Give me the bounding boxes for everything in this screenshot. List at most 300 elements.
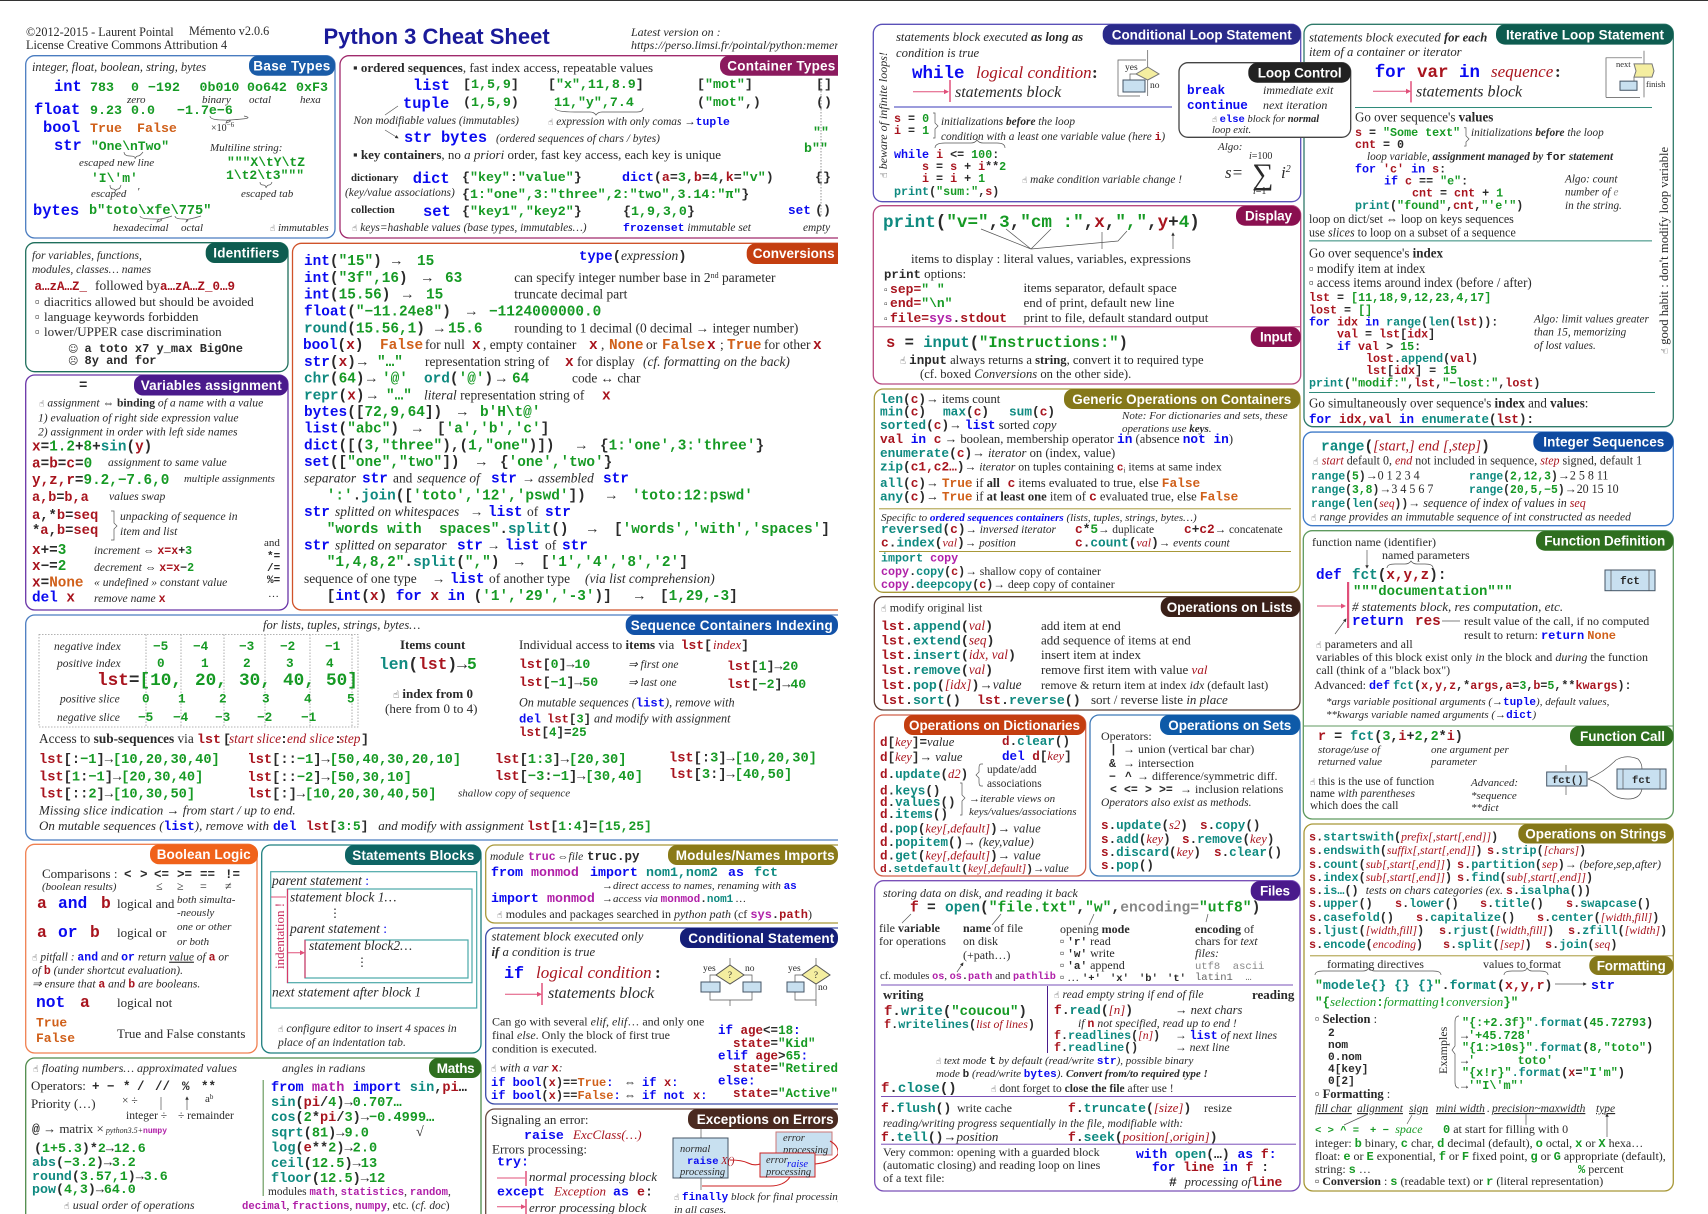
heading: maths: Maths — [437, 1061, 475, 1076]
conversions content: separator — [304, 471, 357, 486]
variables content: %= — [267, 575, 281, 587]
index table: 1 — [178, 692, 186, 707]
open syntax: storing data on disk, and reading it back — [883, 886, 1079, 900]
string methods: .center([width,fill]) — [1544, 910, 1659, 925]
set methods — [1101, 818, 1282, 873]
identifiers content: a toto x7 y_max BigOne — [84, 342, 243, 356]
conversions content: , — [601, 337, 604, 352]
base types content: −6 — [227, 121, 235, 129]
list descriptions: remove & return item at index idx (default last) — [1041, 678, 1268, 692]
set operators: → inclusion relations — [1180, 782, 1284, 796]
maths right content: floor(12.5)→12 — [271, 1172, 385, 1187]
boolean content: ☝ pitfall : and and or return value of a or — [32, 952, 229, 965]
list operations — [881, 601, 1081, 708]
conditional syntax: if a condition is true — [492, 945, 595, 959]
indexing text: lst[:]→[10,20,30,40,50] — [248, 788, 436, 803]
formatting mini-language: float: e or E exponential, f or F fixed point, g or G appropriate (default), — [1315, 1149, 1666, 1164]
index table: 3 — [262, 692, 270, 707]
heading: files: Files — [1260, 884, 1290, 898]
conversions content: → — [477, 455, 486, 471]
def syntax: Advanced: def fct(x,y,z,*args,a=3,b=5,**kwargs): — [1314, 678, 1632, 693]
format syntax: values to format — [1483, 957, 1562, 971]
conversions content: , empty container — [483, 337, 577, 352]
boolean content: > — [140, 868, 148, 882]
variables content: x+=3 — [32, 543, 66, 559]
conversions content: 'toto:12:pswd' — [632, 488, 753, 504]
exceptions syntax: raise — [524, 1128, 564, 1143]
base types content: hexa — [300, 94, 321, 106]
boolean content: or both — [177, 936, 210, 948]
list operations: lst.remove(val) — [881, 662, 993, 678]
conversions content: of — [527, 504, 539, 519]
container types content: (ordered sequences of chars / bytes) — [496, 133, 660, 145]
maths right content: ceil(12.5)→13 — [271, 1157, 377, 1172]
string methods: s.casefold() — [1309, 911, 1394, 925]
variables content: a=b=c=0 — [32, 457, 92, 473]
conversions content: "…" — [377, 355, 403, 371]
header credits: Mémento v2.0.6 — [189, 24, 269, 38]
conversions content: or — [646, 337, 658, 352]
boolean content: = — [200, 879, 207, 893]
container types content: tuple — [403, 95, 449, 113]
open syntax: utf8 ascii — [1195, 961, 1264, 973]
call syntax: Advanced: — [1470, 777, 1518, 789]
index table: positive slice — [59, 694, 120, 706]
format examples: "{:+2.3f}".format(45.72793) — [1462, 1016, 1653, 1030]
index table: 3 — [286, 656, 294, 671]
variables content — [32, 378, 281, 607]
go over values — [1309, 110, 1652, 241]
boolean shortcut code: ⇔ — [624, 1088, 636, 1102]
range content: range(2,12,3)→2 5 8 11 — [1469, 469, 1608, 484]
conversions content: b'H\t@' — [480, 405, 540, 421]
conversions content: can specify integer number base in 2 — [514, 270, 711, 285]
latest version note — [630, 28, 838, 52]
dictionary operations: d.values() — [880, 796, 956, 810]
conversions content: 15.6 — [448, 321, 483, 337]
heading: boolean logic: Boolean Logic — [157, 847, 251, 862]
selection list: 4[key] — [1328, 1064, 1368, 1076]
with open guarded block: (automatic closing) and reading loop on lines — [883, 1158, 1101, 1172]
conversions content: → — [607, 488, 616, 504]
indexing text: lst[−1]→50 — [519, 675, 598, 690]
close flush seek: write cache — [957, 1101, 1012, 1115]
dictionary operations: d.items() — [880, 808, 948, 822]
base types content: binary — [202, 94, 231, 106]
variables content: y,z,r=9.2,−7.6,0 — [32, 473, 169, 489]
list descriptions: add sequence of items at end — [1041, 633, 1191, 648]
conversions content: → — [522, 471, 535, 486]
generic operations content: copy.copy(c)→ shallow copy of container — [881, 565, 1101, 579]
elif code: if age<=18: — [718, 1024, 801, 1038]
conversions content: [1,29,-3] — [660, 589, 738, 605]
indexing text: ] — [361, 732, 369, 747]
formatting mini-language: < > ^ = — [1315, 1125, 1359, 1137]
def syntax: call (think of a "black box") — [1316, 663, 1450, 677]
def syntax: *args variable positional arguments (→tuple), default values, — [1326, 696, 1610, 709]
modules content: monmod — [531, 865, 579, 880]
string methods: s.ljust([width,fill]) — [1309, 923, 1424, 938]
boolean content: < — [124, 868, 132, 882]
variables content: ☝ assignment ⇔ binding of a name with a value — [39, 397, 263, 410]
heading: conditional loop statement — [1103, 24, 1301, 45]
heading: exceptions on errors: Exceptions on Errors — [697, 1112, 834, 1127]
go over index: lst = [11,18,9,12,23,4,17] — [1309, 291, 1491, 305]
indexing text: lst[3:]→[40,50] — [669, 768, 792, 783]
heading: exceptions on errors — [688, 1109, 838, 1129]
conversions content: parameter — [719, 270, 776, 285]
while example: print("sum:",s) — [894, 185, 999, 199]
heading: identifiers: Identifiers — [213, 246, 279, 260]
base types content: ×10 — [211, 123, 227, 134]
indexing text: lst[1:3]→[20,30] — [495, 753, 626, 768]
icon: if/else flowchart: ? — [728, 970, 732, 980]
conversions content: truncate decimal part — [514, 287, 628, 302]
while example: while i <= 100: — [894, 148, 999, 162]
heading: operations on strings — [1518, 824, 1673, 844]
conversions content: for display — [577, 354, 635, 369]
heading: identifiers — [206, 243, 288, 263]
conversions content: "words with spaces".split() — [327, 522, 569, 538]
boolean content: <= — [154, 868, 169, 882]
boolean content: not — [36, 993, 65, 1012]
variables content: … — [268, 588, 279, 600]
elif explanation: Can go with several elif, elif… and only one — [492, 1015, 704, 1029]
formatting mini-language: 0 at start for filling with 0 — [1443, 1122, 1568, 1137]
conditional syntax: statements block — [548, 985, 655, 1002]
maths left content: ☝ usual order of operations — [64, 1198, 195, 1212]
indexing text: [1:4]=[15,25] — [550, 819, 652, 834]
open syntax: (+path…) — [963, 948, 1010, 962]
boolean content: -neously — [177, 907, 214, 919]
format syntax: formating directives — [1327, 957, 1424, 971]
open syntax: '+' — [1082, 973, 1101, 985]
conversions content: → — [467, 305, 476, 321]
conversions content: False — [662, 338, 705, 354]
icon: if/else flowchart: yes — [703, 964, 716, 974]
indexing text: and modify with assignment — [375, 818, 524, 833]
conversions content: sequence of — [417, 471, 482, 486]
with open guarded block: Very common: opening with a guarded block — [883, 1145, 1100, 1159]
maths right content: decimal, fractions, numpy, etc. (cf. doc) — [242, 1200, 450, 1213]
set operators: | — [1110, 744, 1117, 757]
loop control content: immediate exit — [1263, 83, 1334, 97]
generic operations content: (c) — [1032, 405, 1055, 420]
exception flow diagram: raise — [787, 1159, 808, 1170]
base types content: zero — [126, 94, 146, 106]
boolean content: ≥ — [177, 879, 184, 893]
loop control content: loop exit. — [1212, 125, 1251, 136]
maths left content: ☝ floating numbers… approximated values — [33, 1061, 237, 1075]
maths left content: + — [92, 1080, 100, 1094]
string methods: s — [1545, 938, 1552, 952]
heading: conversions — [747, 243, 847, 264]
container types content: empty — [803, 222, 831, 234]
heading: operations on sets — [1160, 715, 1300, 735]
close flush seek: .seek(position[,origin]) — [1076, 1129, 1218, 1145]
string methods: s — [1457, 871, 1464, 885]
generic operations content: items at same index — [1125, 460, 1222, 474]
conversions content: ord — [424, 372, 450, 388]
format examples: Examples — [1436, 1026, 1450, 1074]
conversions content: str — [304, 538, 330, 554]
maths right content: sin(pi/4)→0.707… — [271, 1096, 402, 1111]
while syntax: while — [912, 64, 965, 84]
conversions content: chr(64) — [304, 372, 364, 388]
heading: sequence containers indexing: Sequence Containers Indexing — [631, 618, 833, 633]
conversions content: x — [813, 338, 822, 354]
identifiers content — [32, 250, 254, 368]
conversions content: None — [609, 338, 644, 354]
conversions content: str — [562, 538, 588, 554]
icon: function call flow — [1547, 757, 1666, 799]
set methods: .copy() — [1208, 819, 1260, 833]
base types content: bool — [43, 119, 80, 137]
while syntax: logical condition — [976, 63, 1092, 82]
heading: operations on strings: Operations on Strings — [1525, 826, 1666, 842]
panel: sequence containers indexing — [26, 615, 856, 840]
heading: variables assignment: Variables assignment — [141, 378, 282, 393]
call syntax: ☝ this is the use of function — [1310, 776, 1435, 788]
boolean shortcut code: if bool(x)==False: — [491, 1089, 621, 1103]
conversions content: x — [565, 355, 574, 371]
close flush seek: f.tell()→position — [881, 1129, 998, 1145]
boolean shortcut code: : — [671, 1076, 678, 1090]
exception flow diagram: normal — [680, 1144, 710, 1155]
base types content: escaped tab — [241, 188, 294, 200]
icon: function call flow: fct() — [1552, 775, 1584, 787]
conversions content: int("3f",16) — [304, 271, 408, 287]
nested blocks diagram: parent statement : — [289, 921, 387, 936]
open syntax: ▫ 'w' write — [1060, 946, 1115, 961]
variables content: del x — [32, 591, 75, 607]
format syntax: "modele{} {} {}".format(x,y,r) — [1315, 978, 1552, 993]
generic operations content: c — [1075, 522, 1083, 537]
index table: 0 — [142, 692, 150, 707]
base types content: bytes — [33, 202, 79, 220]
conversions content: → — [368, 388, 377, 404]
loop control content: continue — [1187, 98, 1248, 113]
set operators: <= — [1124, 784, 1138, 797]
conversions content: → — [588, 522, 597, 538]
exception flow diagram: processing — [782, 1145, 828, 1156]
def syntax: def — [1316, 568, 1342, 584]
string methods: .capitalize() — [1423, 911, 1515, 925]
conversions content: {'one','two'} — [500, 455, 612, 471]
open syntax: chars for text — [1195, 934, 1258, 948]
modules content: truc.py — [587, 850, 640, 864]
list operations: lst.insert(idx, val) — [881, 647, 1016, 663]
elif code: state="Retired" — [733, 1062, 846, 1076]
maths right content: sqrt(81)→9.0 — [271, 1127, 369, 1142]
conversions content: (via list comprehension) — [585, 571, 715, 586]
exceptions syntax: as — [613, 1185, 629, 1200]
go over index: than 15, memorizing — [1534, 327, 1627, 339]
call syntax: *sequence — [1471, 790, 1517, 802]
open syntax: file variable — [879, 921, 941, 935]
maths left content: Priority (…) — [31, 1096, 96, 1111]
maths left content: // — [155, 1080, 170, 1094]
heading: statements blocks: Statements Blocks — [352, 848, 474, 863]
base types content: int — [54, 78, 82, 96]
conversions content: (cf. formatting on the back) — [643, 354, 790, 369]
range content: range(3,8)→3 4 5 6 7 — [1311, 482, 1433, 497]
modules content: import — [491, 891, 539, 906]
heading: operations on lists — [1161, 597, 1300, 617]
conversions content: list — [450, 572, 485, 588]
heading: iterative loop statement — [1496, 24, 1673, 45]
conversions content: type(expression) — [579, 248, 687, 265]
selection list: ▫ Selection : — [1315, 1012, 1377, 1026]
base types content: integer, float, boolean, string, bytes — [32, 60, 206, 74]
conversions content: → — [487, 538, 500, 552]
container types content: ("mot",) — [697, 95, 761, 110]
for syntax: for — [1375, 63, 1406, 83]
identifiers content: lower/UPPER case discrimination — [44, 324, 222, 339]
list descriptions — [1041, 618, 1268, 707]
variables content: a,b=b,a — [32, 491, 89, 506]
title: Python 3 Cheat Sheet — [324, 24, 550, 49]
generic operations content: all(c)→ True if all c items evaluated to true, else False — [880, 476, 1200, 491]
indexing text: len(lst)→5 — [379, 655, 477, 674]
conditional syntax — [492, 930, 661, 1005]
conversions content: splitted on whitespaces — [335, 504, 459, 519]
conversions content: → — [392, 254, 401, 270]
boolean shortcut code: x — [664, 1076, 671, 1090]
conversions content: repr(x) — [304, 388, 364, 404]
for syntax: : — [1555, 62, 1561, 81]
heading: iterative loop statement: Iterative Loop Statement — [1506, 27, 1664, 43]
indexing text: lst[::2]→[10,30,50] — [39, 788, 195, 803]
go over values: cnt = 0 — [1355, 138, 1404, 152]
conversions content: ['a','b','c'] — [437, 422, 549, 438]
base types content: False — [137, 121, 177, 136]
formatting mini-language: . — [1487, 1103, 1490, 1115]
heading: statements blocks — [345, 845, 481, 865]
while example: s = s + i**2 — [922, 160, 1006, 174]
format syntax: "{selection:formatting!conversion}" — [1315, 994, 1518, 1010]
dictionary operations: d[key]→ value — [880, 750, 963, 765]
boolean content: (boolean results) — [42, 881, 117, 893]
formatting mini-language: integer: b binary, c char, d decimal (default), o octal, x or X hexa… — [1315, 1136, 1643, 1151]
set methods: .clear() — [1222, 846, 1282, 860]
conversions content: round(15.56,1) — [304, 321, 425, 337]
index table: −5 — [138, 710, 153, 725]
conversions content: → — [635, 589, 644, 605]
list descriptions: remove first item with value val — [1041, 662, 1208, 677]
conversions content: → — [497, 372, 506, 388]
with open guarded block: with open(…) as f: — [1136, 1147, 1277, 1162]
maths left content: ** — [201, 1080, 216, 1094]
maths left content: pow(4,3)→64.0 — [32, 1182, 136, 1197]
close flush seek — [881, 1081, 1296, 1145]
editor note: ☝ configure editor to insert 4 spaces in — [278, 1022, 457, 1035]
index table: −4 — [173, 710, 189, 725]
container types content: collection — [351, 204, 395, 216]
string methods: .zfill([width]) — [1575, 923, 1667, 938]
identifiers content: followed by — [95, 278, 160, 293]
open syntax: name of file — [963, 921, 1023, 935]
conversions content: → — [458, 405, 467, 421]
dictionary operations: d.get(key[,default])→ value — [880, 848, 1041, 864]
exception flow diagram: raise X() — [687, 1156, 735, 1168]
boolean content: Comparisons : — [42, 866, 117, 881]
while syntax: statements block — [955, 84, 1062, 101]
note: dictionaries and sets: Note: For dictionaries and sets, these — [1121, 410, 1288, 422]
modules content: import — [590, 865, 638, 880]
selection list — [1315, 1012, 1377, 1088]
editor note — [277, 1022, 457, 1049]
string methods: s.is…() tests on chars categories (ex. s.isalpha()) — [1309, 883, 1591, 898]
generic operations content: val in c → boolean, membership operator in (absence not in) — [880, 432, 1233, 447]
modules content: monmod — [547, 891, 595, 906]
generic operations content: c.index(val)→ position — [881, 536, 1016, 551]
indexing text: [ — [223, 732, 231, 747]
boolean content: ≤ — [156, 879, 163, 893]
identifiers content: language keywords forbidden — [44, 309, 199, 324]
container types content: {1,9,3,0} — [623, 204, 695, 219]
boolean shortcut code: if bool(x)==True: — [491, 1076, 613, 1090]
go over values: number of e — [1565, 187, 1618, 199]
go over index: lost.append(val) — [1366, 352, 1478, 366]
conversions content: list("abc") — [304, 422, 399, 438]
icon: if/else flowchart: no — [745, 964, 755, 974]
with open guarded block: # processing ofline — [1169, 1175, 1283, 1190]
range content: range(len(seq))→ sequence of index of values in seq — [1311, 496, 1586, 511]
string methods: s — [1480, 897, 1487, 911]
set operators: → intersection — [1123, 756, 1194, 770]
while syntax: condition is true — [896, 46, 980, 60]
icon: fct black box: fct — [1620, 576, 1640, 588]
open syntax: for operations — [879, 934, 946, 948]
call syntax: returned value — [1318, 756, 1382, 768]
heading: base types — [249, 56, 335, 76]
indexing text: Items count — [400, 637, 466, 652]
print options — [884, 266, 1209, 326]
for syntax: statements block — [1416, 83, 1523, 100]
index table: 2 — [219, 692, 227, 707]
latest version note: https://perso.limsi.fr/pointal/python:memento — [631, 38, 850, 52]
maths left content: (1+5.3)*2→12.6 — [34, 1141, 146, 1156]
exception flow diagram: error — [766, 1155, 789, 1166]
go over values: s = "Some text" — [1355, 126, 1460, 140]
editor note: place of an indentation tab. — [277, 1036, 406, 1049]
nested blocks diagram — [271, 872, 477, 1008]
index table: 0 — [157, 656, 165, 671]
modules content: ☝ modules and packages searched in python path (cf sys.path) — [497, 907, 812, 922]
open syntax: ("file.txt","w",encoding="utf8") — [980, 901, 1260, 917]
print options: print to file, default standard output — [1024, 310, 1209, 325]
variables content: decrement ⇔ x=x−2 — [94, 561, 194, 575]
generic operations content: enumerate(c)→ iterator on (index, value) — [880, 446, 1115, 461]
conversions content: x — [589, 338, 598, 354]
indexing text: ] — [741, 638, 749, 653]
container types content: ☝ keys=hashable values (base types, immutables…) — [352, 222, 587, 234]
while syntax: statements block executed as long as — [896, 30, 1083, 44]
string methods — [1309, 830, 1667, 952]
go over index: ▫ modify item at index — [1309, 261, 1426, 276]
string methods: .title() — [1487, 897, 1544, 911]
call syntax: **dict — [1471, 802, 1499, 814]
boolean content: and — [58, 894, 87, 913]
input syntax: (cf. boxed Conversions on the other side). — [920, 367, 1131, 381]
while example: ☝ beware of infinite loops! — [876, 52, 890, 178]
container types content — [345, 60, 832, 235]
boolean shortcut code: : — [700, 1089, 707, 1103]
indexing text: step — [339, 731, 361, 746]
elif code: state="Active" — [733, 1087, 838, 1101]
exceptions syntax: Signaling an error: — [491, 1112, 588, 1127]
